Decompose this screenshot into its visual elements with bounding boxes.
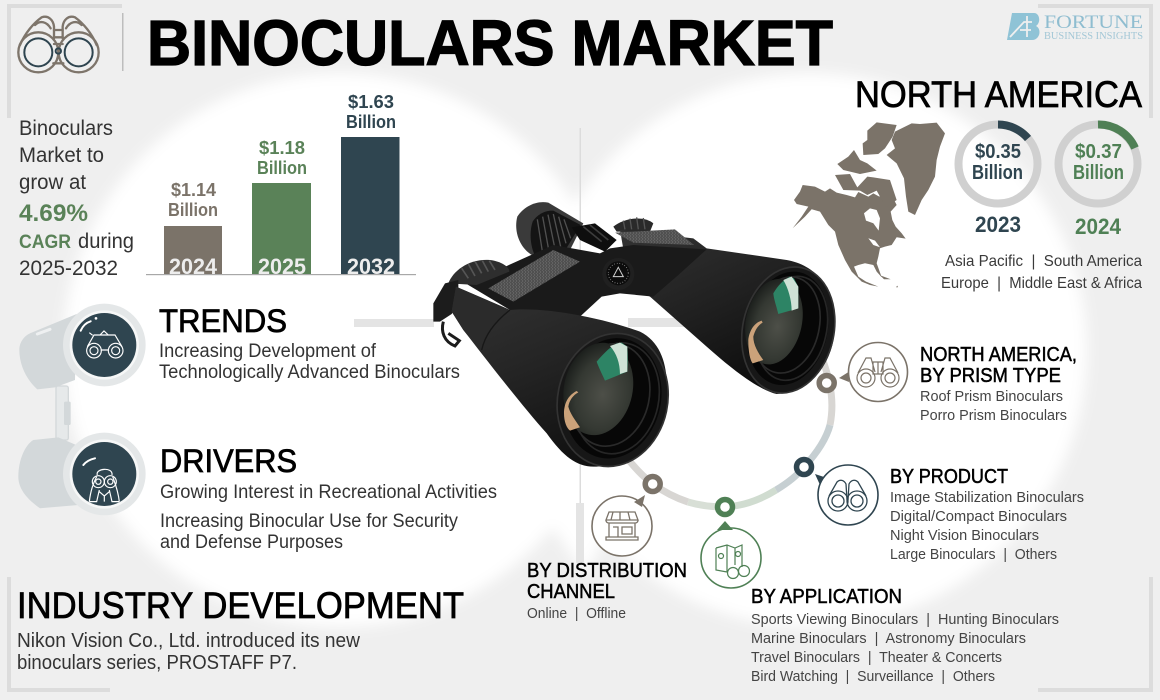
heading: industry development: INDUSTRY DEVELOPMENT (17, 585, 464, 626)
text: drivers: Increasing Binocular Use for Security (160, 511, 458, 532)
heading: north america: NORTH AMERICA (855, 74, 1142, 115)
icon: drivers (63, 433, 146, 515)
panel: CAGR text: Market to (19, 144, 104, 167)
compass (602, 258, 634, 290)
segment: north america by prism type: NORTH AMERICA, (920, 344, 1077, 366)
bridge (467, 223, 707, 317)
text: drivers: and Defense Purposes (160, 532, 343, 553)
other regions (941, 253, 1142, 292)
segment: by product: Digital/Compact Binoculars (890, 508, 1067, 525)
segment: by application: Bird Watching | Surveillance | Others (751, 668, 995, 685)
panel: CAGR text (19, 117, 134, 280)
donut 2024: $0.37 (1075, 141, 1122, 163)
left eyepiece (448, 260, 509, 285)
other regions: Asia Pacific | South America (945, 253, 1142, 270)
logo: Fortune Business Insights: FORTUNE (1044, 12, 1143, 33)
header separator (122, 13, 124, 71)
donut 2023: 2023 (975, 212, 1021, 237)
node: distribution channel (645, 476, 660, 492)
panel: north america (793, 74, 1142, 292)
bar 2025 (252, 138, 311, 279)
text: trends: Increasing Development of (159, 341, 377, 362)
segment: north america by prism type: BY PRISM TYPE (920, 365, 1061, 387)
segment: by product: Image Stabilization Binoculars (890, 489, 1084, 506)
strap loop (433, 280, 459, 346)
logo: Fortune Business Insights (1007, 12, 1143, 42)
node: product (796, 460, 812, 474)
segment: by product (890, 466, 1084, 563)
donut 2023 (958, 124, 1038, 237)
binoculars illustration (433, 202, 846, 477)
bar chart (146, 92, 416, 279)
panel: trends and drivers icons (18, 304, 146, 515)
panel: CAGR text: 4.69% (19, 200, 88, 227)
donut 2024: 2024 (1075, 214, 1122, 239)
logo: Fortune Business Insights: BUSINESS INSIGHTS (1044, 31, 1143, 42)
segment: by application (751, 586, 1059, 685)
segment: north america by prism type (920, 344, 1077, 424)
text: drivers: Growing Interest in Recreational Activities (160, 482, 497, 503)
segment: by product: Night Vision Binoculars (890, 527, 1039, 544)
barrel graphic (18, 314, 80, 508)
bar 2024: Billion (168, 200, 218, 220)
bar 2025: $1.18 (259, 138, 305, 158)
right objective lens (730, 258, 846, 402)
donut 2023: $0.35 (975, 141, 1021, 163)
segment: by distribution channel: CHANNEL (527, 581, 615, 603)
text: trends: Technologically Advanced Binoculars (159, 362, 460, 383)
donut 2024 (1058, 124, 1138, 239)
segment: by distribution channel (527, 560, 687, 622)
panel: CAGR text: CAGR (19, 232, 71, 253)
panel: drivers (160, 443, 497, 553)
node: application (718, 500, 732, 514)
bar 2032: 2032 (347, 254, 395, 279)
center crosshair lines (354, 128, 708, 563)
bar 2024: 2024 (169, 254, 218, 279)
segment: by product: Large Binoculars | Others (890, 546, 1057, 563)
panel: industry development (17, 585, 464, 674)
text: industry development (17, 630, 361, 674)
segment: by application: Sports Viewing Binoculars | Hunting Binoculars (751, 611, 1059, 628)
right barrel (620, 230, 835, 394)
panel: CAGR text: during (78, 230, 134, 253)
node: north america prism type (819, 376, 834, 390)
bar 2024: $1.14 (171, 180, 216, 200)
segment: by application: BY APPLICATION (751, 586, 902, 608)
left objective lens (545, 323, 680, 477)
text: industry development: Nikon Vision Co., Ltd. introduced its new (17, 630, 361, 652)
heading: trends: TRENDS (159, 303, 287, 339)
panel: trends (159, 303, 460, 383)
segment: by product: BY PRODUCT (890, 466, 1008, 488)
bar 2025: 2025 (258, 254, 306, 279)
donut 2024: Billion (1073, 162, 1124, 184)
back eyepiece (516, 202, 653, 257)
icon: product (815, 465, 878, 525)
segment: by distribution channel: Online | Offline (527, 605, 626, 622)
donut 2023: Billion (972, 162, 1023, 184)
panel: CAGR text: grow at (19, 171, 86, 194)
panel: CAGR text: 2025-2032 (19, 257, 118, 280)
icon: prism type (839, 342, 908, 402)
heading: drivers: DRIVERS (160, 443, 297, 479)
panel: CAGR text: Binoculars (19, 117, 113, 140)
segment: by application: Marine Binoculars | Astronomy Binoculars (751, 630, 1026, 647)
icon: distribution channel (592, 495, 652, 556)
segment: by distribution channel: BY DISTRIBUTION (527, 560, 687, 582)
bar 2032 (341, 92, 400, 279)
left barrel (452, 287, 667, 467)
segment: north america by prism type: Roof Prism Binoculars (920, 388, 1063, 405)
segment: by application: Travel Binoculars | Theater & Concerts (751, 649, 1002, 666)
map: north america (793, 122, 945, 287)
text: trends (159, 341, 460, 383)
text: drivers (160, 482, 497, 553)
segment: north america by prism type: Porro Prism Binoculars (920, 407, 1067, 424)
text: industry development: binoculars series, PROSTAFF P7. (17, 652, 297, 674)
title: BINOCULARS MARKET (147, 7, 833, 79)
bar 2024 (164, 180, 222, 279)
icon: application (701, 521, 761, 588)
segment arc (627, 358, 832, 507)
bar 2032: Billion (346, 112, 396, 132)
icon: binoculars logo (18, 17, 99, 72)
icon: trends (63, 304, 146, 386)
other regions: Europe | Middle East & Africa (941, 275, 1142, 292)
bar 2032: $1.63 (348, 92, 394, 112)
bar 2025: Billion (257, 158, 307, 178)
